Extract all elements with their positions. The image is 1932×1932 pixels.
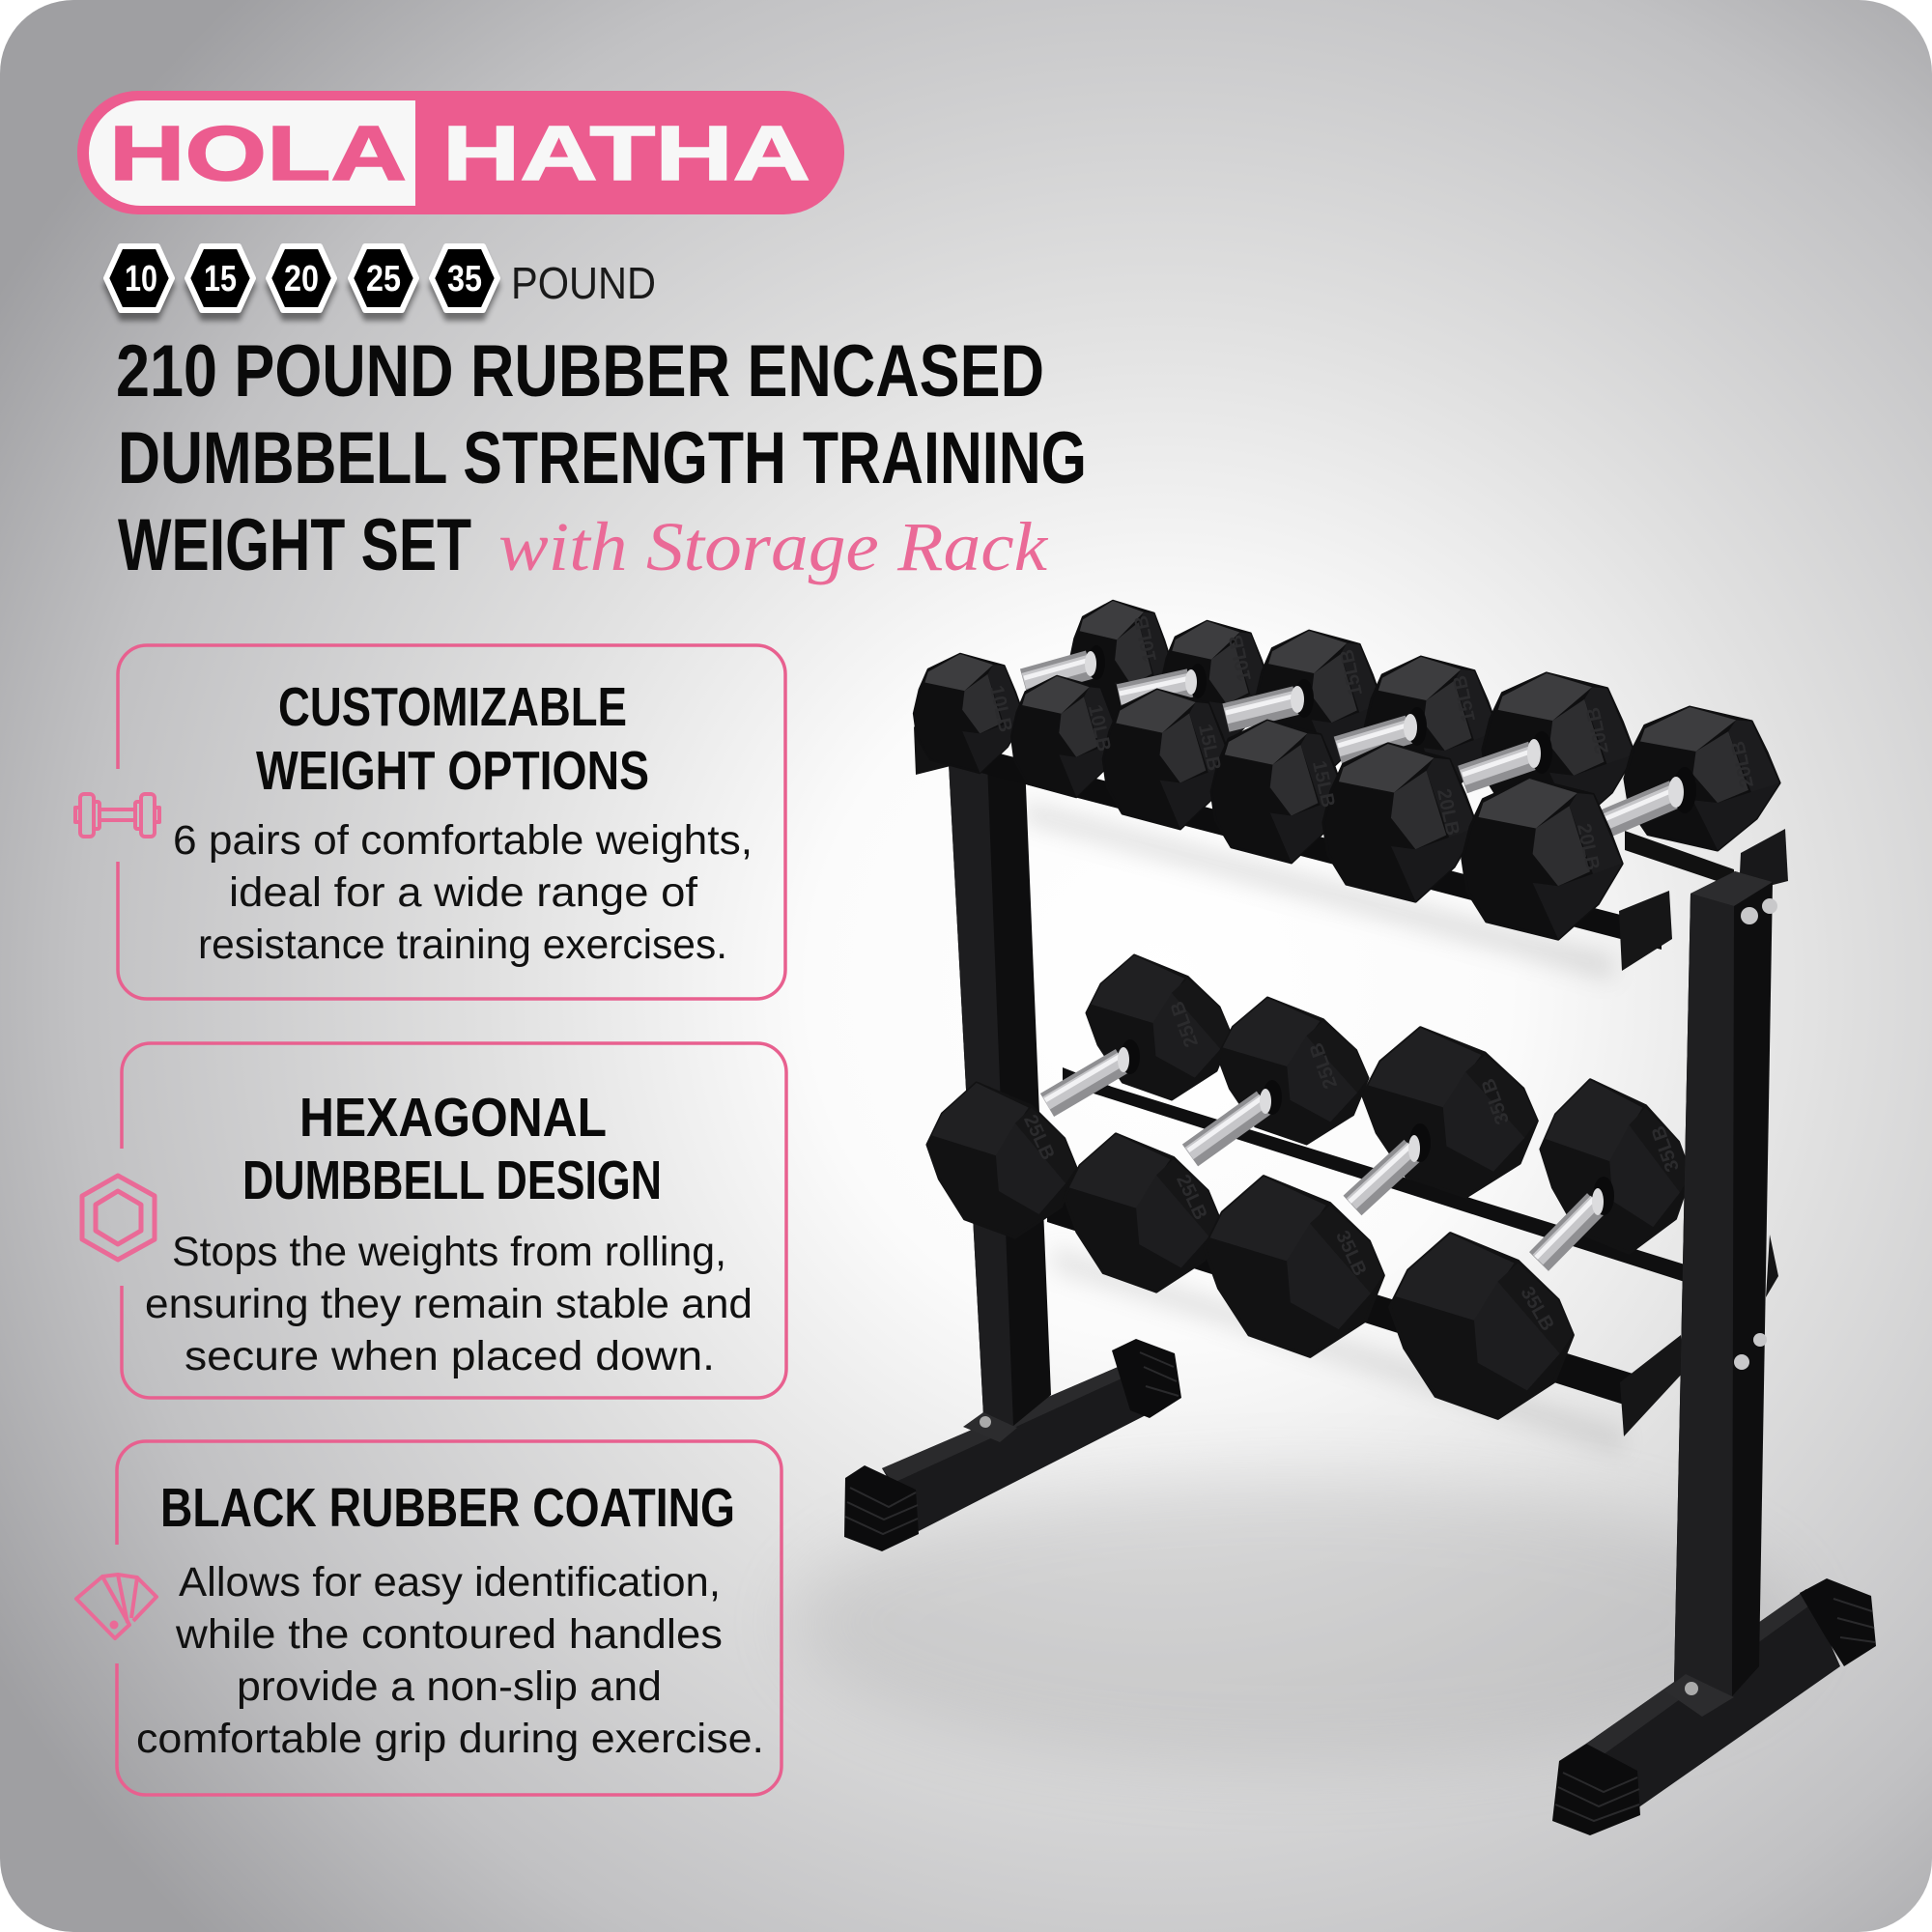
rack shadows — [792, 802, 1797, 1768]
logo: Hola Hatha: HOLA — [109, 110, 407, 196]
top row front dumbbell heads: 10LB — [985, 684, 1016, 734]
lower shelf right bracket — [1620, 1335, 1685, 1436]
panel heading: BLACK RUBBER COATING — [160, 1477, 735, 1539]
badge: 25 — [351, 246, 416, 310]
top row back dumbbell heads: 15LB — [1336, 647, 1367, 697]
title: 210 POUND RUBBER ENCASED — [116, 330, 1044, 412]
panel body text: Stops the weights from rolling, — [172, 1229, 726, 1275]
badge: 10: 10 — [125, 259, 157, 299]
badge: 35: 35 — [447, 259, 482, 299]
panel body text: ideal for a wide range of — [229, 869, 698, 916]
top row front dumbbell heads — [914, 654, 1622, 939]
lower row front dumbbell heads: 35LB — [1331, 1228, 1371, 1279]
top row back dumbbell heads: 10LB — [1225, 633, 1256, 683]
foot: back left — [1112, 1339, 1181, 1418]
panel body text: resistance training exercises. — [198, 922, 727, 968]
panel body text: Allows for easy identification, — [179, 1559, 721, 1605]
badge: 25: 25 — [366, 259, 401, 299]
top row front dumbbell heads: 10LB — [1084, 703, 1115, 753]
top shelf right bracket — [1619, 891, 1672, 971]
badge: 15: 15 — [204, 259, 237, 299]
top row front dumbbell heads: 20LB — [1433, 787, 1463, 838]
lower row back dumbbell heads: 35LB — [1478, 1075, 1514, 1127]
panel body text — [136, 1559, 764, 1762]
lower row front dumbbell heads: 25LB — [1019, 1112, 1059, 1163]
top row back dumbbell heads: 10LB — [1130, 613, 1161, 664]
top row back dumbbell heads: 20LB — [1727, 739, 1758, 789]
title — [116, 330, 1087, 586]
lower shelf bars — [1047, 1067, 1778, 1410]
icon: dumbbell — [75, 794, 159, 837]
foot: back right — [1800, 1578, 1876, 1666]
panel body text: comfortable grip during exercise. — [136, 1716, 764, 1762]
top row front dumbbell heads: 20LB — [1573, 822, 1604, 872]
top shelf front bar — [966, 745, 1662, 950]
lower row handles — [1045, 1039, 1614, 1262]
top row back dumbbell heads: 20LB — [1582, 705, 1613, 755]
top row handles — [1024, 645, 1696, 824]
panel body text: ensuring they remain stable and — [145, 1281, 753, 1327]
weight badges — [103, 246, 500, 321]
pound label: POUND — [511, 258, 656, 308]
badge: 15 — [187, 246, 253, 310]
product photo: dumbbell rack — [792, 601, 1876, 1835]
badge: 10 — [106, 246, 172, 310]
icon: hexagon — [82, 1176, 155, 1260]
panel heading: DUMBBELL DESIGN — [242, 1150, 662, 1211]
logo: Hola Hatha: HATHA — [442, 110, 810, 196]
top row front dumbbell heads: 15LB — [1308, 759, 1339, 810]
panel heading — [256, 676, 649, 802]
panel body text: secure when placed down. — [185, 1333, 715, 1379]
panel heading: HEXAGONAL — [299, 1087, 607, 1149]
panel: black rubber coating — [76, 1441, 781, 1795]
panel: hexagonal dumbbell design — [82, 1043, 786, 1398]
lower row front dumbbell heads: 35LB — [1516, 1283, 1558, 1335]
top row back dumbbell heads: 15LB — [1449, 673, 1480, 724]
title: DUMBBELL STRENGTH TRAINING — [118, 417, 1087, 499]
panel body text: while the contoured handles — [175, 1611, 723, 1658]
left post and base — [844, 763, 1181, 1551]
lower row back dumbbell heads: 25LB — [1167, 998, 1203, 1050]
panel body text: 6 pairs of comfortable weights, — [173, 817, 753, 864]
lower row front dumbbell heads: 25LB — [1172, 1172, 1211, 1223]
top row front dumbbell heads: 15LB — [1194, 723, 1225, 773]
lower row back dumbbell heads: 25LB — [1306, 1039, 1342, 1092]
lower row back dumbbell heads — [1087, 955, 1690, 1253]
lower row front dumbbell heads — [927, 1083, 1573, 1418]
panel: customizable weight options — [75, 645, 785, 999]
badge: 20 — [269, 246, 334, 310]
right post and base — [1552, 871, 1876, 1835]
lower row back dumbbell heads: 35LB — [1648, 1122, 1684, 1175]
panel body text — [173, 817, 753, 968]
top shelf back bar and brackets — [914, 726, 1788, 894]
badge: 35 — [432, 246, 497, 310]
panel body text — [145, 1229, 753, 1379]
panel body text: provide a non-slip and — [237, 1663, 662, 1710]
panel heading: WEIGHT OPTIONS — [256, 740, 649, 802]
panel heading — [242, 1087, 662, 1211]
foot: front right — [1552, 1744, 1640, 1835]
foot: front left — [844, 1465, 919, 1551]
logo: Hola Hatha — [77, 91, 844, 214]
title: WEIGHT SET — [118, 504, 471, 586]
badge: 20: 20 — [284, 259, 319, 299]
panel heading: CUSTOMIZABLE — [278, 676, 627, 738]
icon: rubber swatch fan — [76, 1575, 156, 1638]
bolts — [1734, 898, 1777, 1370]
top row back dumbbell heads — [1069, 601, 1779, 850]
script subtitle: with Storage Rack — [498, 508, 1049, 585]
